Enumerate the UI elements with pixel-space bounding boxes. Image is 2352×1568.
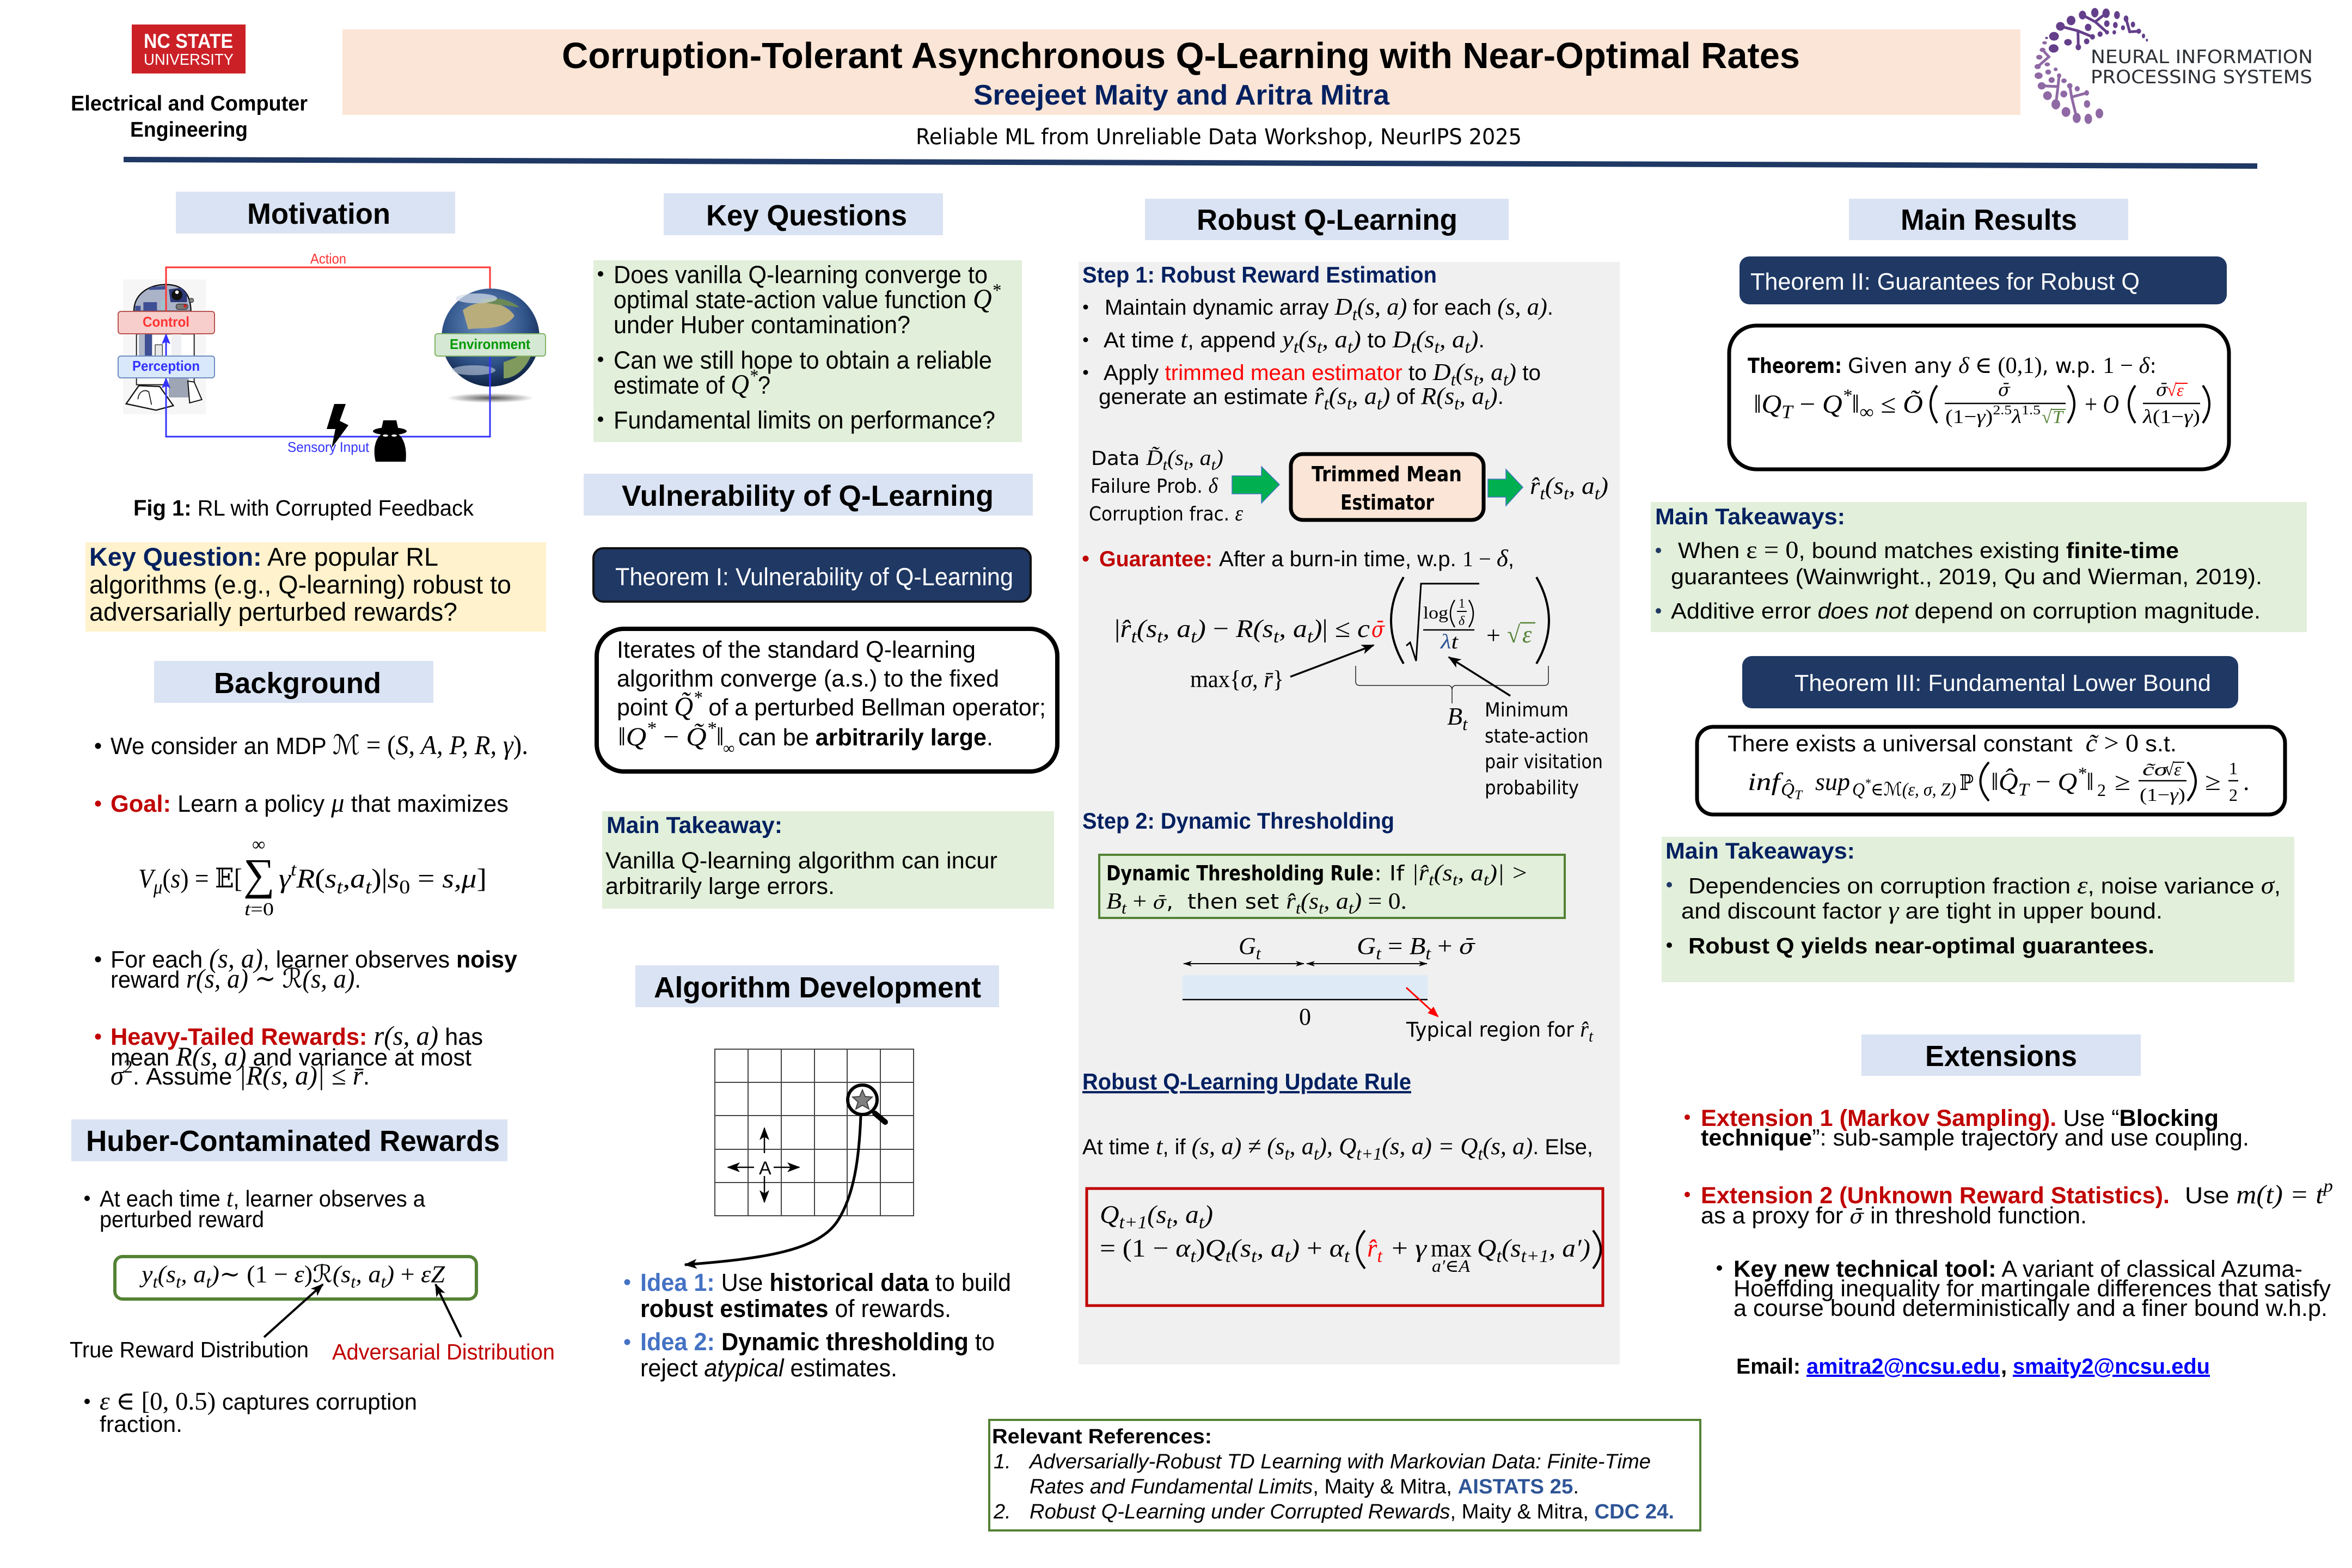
header: department name (71, 92, 308, 142)
formula: value function: ∞ (252, 835, 265, 855)
theorem I statement: ∞ (723, 739, 734, 757)
heading: robust Q-learning: Robust Q-Learning (1197, 204, 1457, 236)
update rule condition: At time t, if (s, a) ≠ (st, at), Qt+1(s, a) = Qt(s, a). Else, (1082, 1132, 1593, 1163)
formula: trimmed mean bound: σ̄ (1371, 617, 1385, 642)
theorem II banner: Theorem II: Guarantees for Robust Q (1750, 268, 2140, 295)
update rule formula box: a′∈A (1432, 1256, 1470, 1276)
theorem I statement: can be arbitrarily large. (738, 724, 993, 751)
RL feedback diagram: Action (310, 250, 346, 267)
bullet: heavy-tailed rewards: σ2. Assume |R(s, a)| ≤ r̄. (111, 1057, 370, 1091)
dynamic thresholding rule: Dynamic Thresholding Rule (1106, 861, 1374, 885)
panel: robust Q-learning (1079, 199, 1620, 1364)
RL feedback diagram (118, 250, 546, 462)
update rule formula box: = (1 − αt)Qt(st, at) + αt (1100, 1234, 1351, 1266)
logo: NeurIPS: PROCESSING SYSTEMS (2091, 66, 2312, 88)
theorem III statement: (1−γ) (2140, 785, 2185, 805)
title banner: Corruption-Tolerant Asynchronous Q-Learning with Near-Optimal Rates (562, 35, 1800, 76)
threshold diagram: Gt (1239, 933, 1261, 963)
title banner (342, 29, 2020, 115)
heading: extensions (1861, 1034, 2141, 1076)
RL feedback diagram: Sensory Input (287, 439, 370, 455)
title banner: Sreejeet Maity and Aritra Mitra (973, 79, 1390, 111)
question list: under Huber contamination? (614, 311, 910, 339)
key technical tool: Key new technical tool: A variant of classical Azuma- (1734, 1256, 2302, 1282)
formula: value function: Vμ(s) = 𝔼[ (138, 863, 242, 898)
icon: magnifier with star (848, 1085, 885, 1122)
arrow: adversarial (436, 1284, 461, 1337)
threshold diagram (1183, 933, 1594, 1045)
idea 1: Idea 1: Use historical data to build (640, 1269, 1011, 1296)
box: trimmed mean estimator: Estimator (1340, 491, 1434, 514)
extension 2 (1685, 1177, 2333, 1229)
theorem II statement (1729, 326, 2229, 469)
panel: references: Robust Q-Learning under Corrupted Rewards, Maity & Mitra, CDC 24. (1030, 1500, 1674, 1523)
logo: NeurIPS (2035, 8, 2313, 124)
annotation: minimum visitation probability: state-action (1485, 725, 1589, 748)
key technical tool: a course bound deterministically and a finer bound w.h.p. (1734, 1295, 2328, 1321)
heading: robust Q-learning (1145, 199, 1509, 240)
theorem II statement: σ̄ (1998, 379, 2011, 400)
bullet: noisy reward (95, 944, 518, 994)
panel: motivation (85, 192, 546, 632)
arrow: true reward (264, 1284, 323, 1337)
formula: trimmed mean bound: √ (1507, 621, 1521, 648)
box: control (118, 311, 215, 334)
theorem II statement: λ(1−γ) (2142, 406, 2200, 427)
contact email: smaity2@ncsu.edu (2013, 1355, 2210, 1379)
update rule formula box: + γ (1392, 1234, 1428, 1263)
box: perception (118, 356, 215, 378)
main takeaways: theorem II: Main Takeaways: (1655, 504, 1845, 529)
box: environment: Environment (450, 336, 530, 352)
panel: references: Relevant References: (992, 1425, 1212, 1448)
callout: key question: algorithms (e.g., Q-learning) robust to (89, 570, 511, 599)
idea 2: Idea 2: Dynamic thresholding to (640, 1328, 995, 1356)
theorem III statement: Q*∈ℳ(ε, σ, Z) (1852, 776, 1956, 800)
header: NC State logo: NC STATE (144, 30, 233, 52)
main takeaways: theorem III: Main Takeaways: (1665, 838, 1855, 863)
dynamic thresholding rule (1099, 855, 1565, 918)
theorem III statement: ℙ (1959, 770, 1974, 795)
theorem II statement: + O (2085, 390, 2119, 419)
panel: vulnerability of Q-learning (584, 474, 1057, 909)
question list: optimal state-action value function Q* (614, 280, 1001, 314)
idea 1 (624, 1269, 1011, 1322)
main takeaway: Vanilla Q-learning algorithm can incur (605, 848, 997, 874)
estimator inputs (1089, 445, 1243, 525)
box: perception: Perception (132, 358, 200, 374)
formula: trimmed mean bound (1114, 577, 1549, 664)
step 1 bullets: Maintain dynamic array Dt(s, a) for each (s, a). (1105, 293, 1553, 324)
theorem II statement: √ (2042, 407, 2052, 427)
bullet: heavy-tailed rewards: mean R(s, a) and variance at most (111, 1042, 471, 1071)
update rule formula box: Qt(st+1, a′) (1477, 1234, 1590, 1266)
step 1 bullets: Apply trimmed mean estimator to Dt(st, at) to (1104, 358, 1541, 389)
grey background panel (1079, 262, 1620, 1364)
theorem III statement: c̃σ (2142, 760, 2169, 780)
bullet: heavy-tailed rewards (95, 1021, 483, 1091)
icon: robot (123, 279, 206, 414)
panel: huber-contaminated rewards (70, 1119, 555, 1437)
box: trimmed mean estimator (1291, 454, 1484, 520)
callout: key question: adversarially perturbed rewards? (89, 597, 457, 626)
annotation: minimum visitation probability: probability (1485, 777, 1579, 799)
theorem III statement: 2 (2097, 780, 2106, 800)
annotation: max sigma (1190, 645, 1374, 693)
heading: main results: Main Results (1901, 204, 2077, 236)
main takeaways: theorem III: Dependencies on corruption fraction ε, noise variance σ, (1688, 871, 2281, 899)
theorem II statement: Given any δ ∈ (0,1), w.p. 1 − δ: (1848, 353, 2157, 378)
theorem I statement (597, 629, 1057, 771)
estimator output label: r̂t(st, at) (1530, 473, 1608, 503)
theorem III banner (1742, 656, 2238, 708)
box: control: Control (143, 314, 189, 330)
question list: estimate of Q*? (614, 365, 770, 400)
formula: trimmed mean bound: ε (1522, 621, 1532, 648)
annotation: minimum visitation probability: Minimum (1485, 699, 1569, 721)
bullet: noisy reward: reward r(s, a) ∼ ℛ(s, a). (111, 964, 361, 994)
question list: Fundamental limits on performance? (614, 406, 995, 434)
step 1 bullets: generate an estimate r̂t(st, at) of R(st, at). (1099, 382, 1504, 413)
theorem III statement: ‖Q̂T − Q*‖ (1991, 764, 2094, 800)
heading: key questions: Key Questions (706, 199, 907, 232)
update rule formula box: r̂t (1367, 1234, 1383, 1266)
annotation: brace B_t (1356, 666, 1548, 734)
theorem II statement: ε (2177, 380, 2184, 400)
extension 2: Extension 2 (Unknown Reward Statistics). (1701, 1183, 2170, 1209)
key technical tool: Hoeffding inequality for martingale differences that satisfy (1734, 1276, 2331, 1302)
header: NC State logo: UNIVERSITY (144, 51, 234, 69)
bullet: MDP: We consider an MDP ℳ = (S, A, P, R, γ). (111, 730, 528, 760)
idea 2 (624, 1328, 995, 1382)
formula: value function: t=0 (244, 899, 274, 920)
panel: references: Adversarially-Robust TD Learning with Markovian Data: Finite-Time (1028, 1450, 1651, 1473)
formula box: contamination model (115, 1257, 476, 1299)
theorem III statement: √ (2164, 760, 2175, 780)
step 1 bullets (1083, 293, 1553, 413)
main takeaway: arbitrarily large errors. (605, 873, 835, 899)
idea 2: reject atypical estimates. (640, 1354, 897, 1382)
box: environment (435, 334, 546, 356)
update rule formula box: max (1431, 1234, 1472, 1262)
main takeaways: theorem III (1662, 837, 2294, 982)
heading: huber: Huber-Contaminated Rewards (86, 1125, 500, 1157)
bullet: goal: Goal: Learn a policy μ that maximizes (111, 788, 509, 818)
theorem III statement: inf (1748, 768, 1784, 795)
icon: globe (442, 289, 540, 403)
panel: background (95, 661, 528, 1091)
label: true reward: True Reward Distribution (70, 1337, 309, 1362)
heading: main results (1849, 199, 2128, 240)
threshold diagram: Gt = Bt + σ̄ (1357, 933, 1476, 963)
theorem III statement: ≥ (2205, 768, 2221, 795)
panel: references: 1. (994, 1450, 1011, 1473)
figure caption: Fig 1: RL with Corrupted Feedback (133, 495, 474, 520)
bullet: perturbed reward: perturbed reward (100, 1206, 264, 1232)
main takeaway (602, 811, 1054, 909)
key technical tool (1717, 1256, 2331, 1321)
dynamic thresholding rule: Bt + σ̄, then set r̂t(st, at) = 0. (1106, 889, 1407, 917)
contact email: amitra2@ncsu.edu (1806, 1355, 2000, 1379)
step 1 heading: Step 1: Robust Reward Estimation (1082, 262, 1437, 287)
header: department name: Electrical and Computer (71, 92, 308, 115)
question list: Does vanilla Q-learning converge to (614, 261, 988, 289)
theorem II statement: σ̄ (2156, 379, 2169, 400)
main takeaways: theorem III: and discount factor γ are tight in upper bound. (1681, 896, 2163, 924)
annotation: brace B_t: Bt (1447, 702, 1468, 734)
main takeaways: theorem III: Robust Q yields near-optimal guarantees. (1688, 933, 2154, 958)
panel: references: Rates and Fundamental Limits, Maity & Mitra, AISTATS 25. (1030, 1475, 1579, 1498)
main takeaways: theorem II: Additive error does not depend on corruption magnitude. (1671, 598, 2261, 623)
arrow: estimator output (1488, 469, 1523, 506)
callout: key question: Key Question: Are popular RL (89, 542, 438, 571)
theorem I statement: Iterates of the standard Q-learning (617, 636, 976, 663)
annotation: minimum visitation probability: pair visitation (1485, 751, 1603, 773)
theorem II banner (1739, 256, 2227, 304)
formula: trimmed mean bound: δ (1459, 614, 1465, 628)
main takeaways: theorem II: When ε = 0, bound matches existing finite-time (1678, 536, 2179, 564)
update rule heading: Robust Q-Learning Update Rule (1082, 1069, 1411, 1094)
bullet: noisy reward: For each (s, a), learner observes noisy (111, 944, 518, 973)
theorem I banner (593, 548, 1031, 602)
workshop line: Reliable ML from Unreliable Data Workshop, NeurIPS 2025 (916, 125, 1522, 150)
update rule formula box (1087, 1189, 1603, 1306)
panel: key questions (593, 193, 1022, 442)
heading: vulnerability: Vulnerability of Q-Learning (622, 480, 994, 512)
extension 2: as a proxy for σ̄ in threshold function. (1701, 1203, 2087, 1229)
theorem III statement: There exists a universal constant c̃ > 0 s.t. (1728, 729, 2177, 757)
step 1 bullets: At time t, append yt(st, at) to Dt(st, at). (1104, 326, 1485, 357)
heading: background: Background (214, 667, 381, 700)
guarantee line: After a burn-in time, w.p. 1 − δ, (1219, 544, 1514, 572)
header: NC State logo (132, 24, 246, 74)
step 2 heading: Step 2: Dynamic Thresholding (1082, 808, 1394, 834)
estimator inputs: Data D̃t(st, at) (1091, 445, 1223, 474)
formula: value function: γtR(st,at)|s0 = s,μ] (279, 860, 487, 898)
heading: extensions: Extensions (1925, 1040, 2077, 1073)
contact email: , (2001, 1355, 2007, 1379)
dynamic thresholding rule: : If |r̂t(st, at)| > (1374, 860, 1528, 889)
guarantee line (1082, 544, 1514, 572)
theorem III statement: 1 (2229, 758, 2238, 778)
theorem III statement: ≥ (2115, 768, 2130, 795)
contact email: Email: (1736, 1355, 1800, 1379)
guarantee line: Guarantee: (1099, 547, 1212, 571)
extension 2: Use m(t) = t p (2185, 1177, 2333, 1209)
update rule formula box: Qt+1(st, at) (1100, 1200, 1213, 1233)
theorem III statement: sup (1815, 768, 1850, 795)
formula: trimmed mean bound: 1 (1459, 597, 1465, 611)
theorem II statement: ‖QT − Q*‖∞ ≤ Õ (1754, 386, 1923, 422)
heading: motivation (176, 192, 455, 234)
formula: value function (138, 835, 487, 920)
header: department name: Engineering (130, 118, 248, 142)
idea 1: robust estimates of rewards. (640, 1295, 951, 1322)
formula: value function: ∑ (243, 850, 275, 899)
bullet: corruption fraction: fraction. (100, 1411, 182, 1437)
arrow: input to estimator (1232, 467, 1279, 503)
formula: trimmed mean bound: |r̂t(st, at) − R(st, at)| ≤ c (1114, 615, 1370, 647)
threshold diagram: Typical region for r̂t (1406, 1016, 1594, 1045)
estimator inputs: Failure Prob. δ (1091, 473, 1218, 498)
heading: algorithm development: Algorithm Development (654, 971, 981, 1004)
question list (593, 260, 1022, 442)
theorem III statement: 2 (2229, 785, 2238, 805)
heading: motivation: Motivation (247, 198, 390, 230)
annotation: max sigma: max{σ, r̄} (1190, 666, 1284, 693)
icon: lightning bolt (327, 404, 348, 448)
logo: NeurIPS: NEURAL INFORMATION (2091, 46, 2313, 68)
main takeaway: Main Takeaway: (607, 812, 782, 838)
box: trimmed mean estimator: Trimmed Mean (1312, 462, 1462, 486)
extension 1 (1685, 1105, 2249, 1151)
bullet: perturbed reward: At each time t, learner observes a (100, 1184, 426, 1212)
main takeaways: theorem II (1651, 502, 2307, 632)
theorem II statement: Theorem: (1748, 354, 1842, 378)
theorem I statement: algorithm converge (a.s.) to the fixed (617, 665, 999, 692)
theorem I statement: point Q̃* of a perturbed Bellman operator; (617, 688, 1046, 721)
heading: vulnerability (584, 474, 1033, 516)
bullet: corruption fraction: ε ∈ [0, 0.5) captures corruption (100, 1387, 417, 1416)
bullet: heavy-tailed rewards: Heavy-Tailed Rewards: r(s, a) has (111, 1021, 483, 1051)
panel: main results (1651, 199, 2307, 982)
theorem III banner: Theorem III: Fundamental Lower Bound (1794, 670, 2211, 696)
bullet: perturbed reward (84, 1184, 426, 1232)
panel: references (989, 1420, 1700, 1530)
callout: key question (85, 542, 546, 632)
extension 1: technique”: sub-sample trajectory and use coupling. (1701, 1125, 2249, 1151)
extension 1: Extension 1 (Markov Sampling). Use “Blocking (1701, 1105, 2219, 1131)
panel: references: 2. (993, 1500, 1011, 1523)
theorem II statement: T (2053, 407, 2064, 427)
icon: spy (373, 420, 407, 462)
bullet: corruption fraction (84, 1387, 417, 1437)
contact email (1736, 1355, 2210, 1379)
formula: trimmed mean bound: λt (1440, 630, 1459, 653)
arrow: curved pointer to idea (685, 1116, 861, 1265)
question list: Can we still hope to obtain a reliable (614, 346, 992, 374)
heading: key questions (664, 193, 943, 235)
theorem III statement: ε (2174, 760, 2181, 780)
theorem I statement: ‖Q* − Q̃*‖ (618, 719, 724, 751)
theorem III statement: . (2243, 768, 2250, 795)
heading: background (154, 661, 433, 703)
panel: algorithm development (624, 965, 1011, 1382)
threshold diagram: 0 (1299, 1003, 1311, 1030)
theorem II statement: (1−γ)2.5λ1.5 (1945, 403, 2041, 427)
formula: trimmed mean bound: log (1423, 603, 1448, 622)
estimator inputs: Corruption frac. ε (1089, 501, 1243, 525)
label: adversarial: Adversarial Distribution (332, 1339, 555, 1364)
formula: trimmed mean bound: + (1486, 621, 1500, 649)
annotation: minimum visitation probability (1449, 657, 1603, 799)
theorem III statement: Q̂T (1781, 779, 1803, 803)
theorem III statement (1697, 727, 2285, 814)
grid world diagram: A (759, 1158, 771, 1179)
theorem II statement: √ (2167, 380, 2177, 400)
formula box: contamination model: yt(st, at)∼ (1 − ε)ℛ(st, at) + εZ (139, 1261, 445, 1291)
grid world diagram (685, 1049, 914, 1265)
theorem I banner: Theorem I: Vulnerability of Q-Learning (615, 563, 1013, 591)
panel: extensions (1685, 1034, 2333, 1379)
main takeaways: theorem II: guarantees (Wainwright., 2019, Qu and Wierman, 2019). (1671, 564, 2262, 589)
